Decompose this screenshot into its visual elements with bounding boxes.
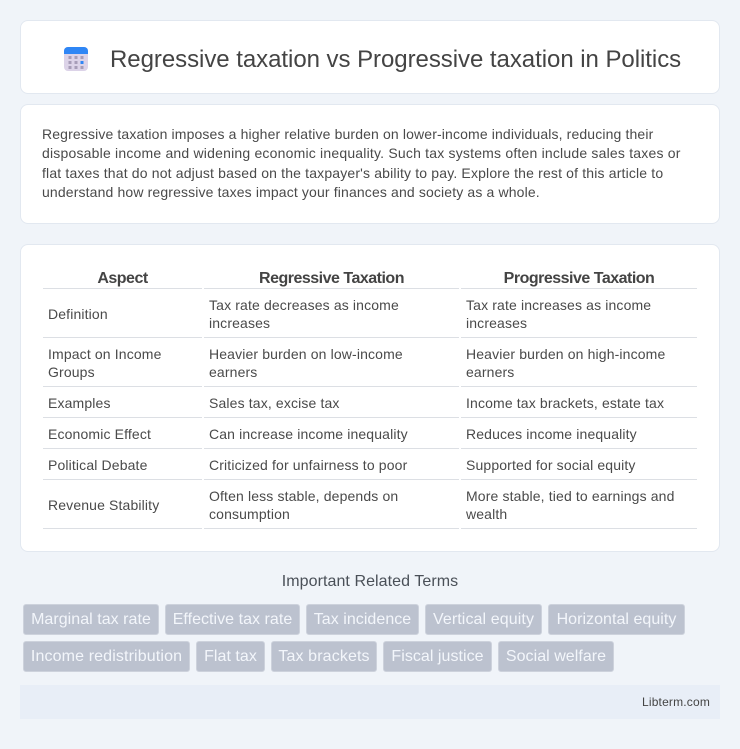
related term tags bbox=[23, 604, 685, 672]
table rows: earners bbox=[466, 364, 514, 380]
related term tags: Fiscal justice bbox=[391, 648, 484, 665]
comparison table card bbox=[20, 244, 720, 552]
table rows: increases bbox=[209, 315, 270, 331]
table rows bbox=[43, 297, 697, 529]
table rows: Supported for social equity bbox=[466, 457, 636, 473]
intro text: flat taxes that do not adjust based on the taxpayer's ability to pay. Explore the rest of this article to bbox=[42, 165, 663, 181]
related term tags: Tax brackets bbox=[278, 648, 370, 665]
table header: Regressive Taxation bbox=[259, 270, 404, 287]
icon: calendar bbox=[64, 47, 88, 71]
header card bbox=[20, 20, 720, 94]
table rows: wealth bbox=[466, 506, 507, 522]
table rows: Tax rate increases as income bbox=[466, 297, 651, 313]
table rows: Definition bbox=[48, 306, 108, 322]
intro card bbox=[20, 104, 720, 224]
table rows: increases bbox=[466, 315, 527, 331]
table rows: Heavier burden on low-income bbox=[209, 346, 403, 362]
related term tags: Vertical equity bbox=[433, 611, 534, 628]
footer credit: Libterm.com bbox=[642, 695, 710, 709]
intro text: understand how regressive taxes impact your finances and society as a whole. bbox=[42, 184, 540, 200]
footer bar bbox=[20, 685, 720, 719]
table rows: Heavier burden on high-income bbox=[466, 346, 665, 362]
table header: Aspect bbox=[97, 270, 148, 287]
related term tags: Horizontal equity bbox=[557, 611, 676, 628]
table header: Progressive Taxation bbox=[504, 270, 654, 287]
table rows: Sales tax, excise tax bbox=[209, 395, 340, 411]
table rows: Groups bbox=[48, 364, 95, 380]
intro text: Regressive taxation imposes a higher relative burden on lower-income individuals, reducing their bbox=[42, 126, 653, 142]
table rows: Economic Effect bbox=[48, 426, 151, 442]
related term tags: Income redistribution bbox=[31, 648, 182, 665]
table rows: Reduces income inequality bbox=[466, 426, 637, 442]
table rows: Political Debate bbox=[48, 457, 148, 473]
related term tags: Marginal tax rate bbox=[31, 611, 151, 628]
comparison table bbox=[43, 270, 697, 529]
table rows: More stable, tied to earnings and bbox=[466, 488, 675, 504]
related term tags: Flat tax bbox=[204, 648, 257, 665]
table rows: consumption bbox=[209, 506, 290, 522]
table rows: Examples bbox=[48, 395, 111, 411]
table rows: Tax rate decreases as income bbox=[209, 297, 399, 313]
intro text: disposable income and widening economic inequality. Such tax systems often include sales taxes or bbox=[42, 145, 681, 161]
related terms heading: Important Related Terms bbox=[282, 573, 458, 590]
table rows: Impact on Income bbox=[48, 346, 162, 362]
table rows: earners bbox=[209, 364, 257, 380]
related term tags: Social welfare bbox=[506, 648, 606, 665]
table rows: Criticized for unfairness to poor bbox=[209, 457, 407, 473]
table rows: Can increase income inequality bbox=[209, 426, 408, 442]
intro text bbox=[42, 126, 681, 200]
table header bbox=[43, 270, 697, 289]
related term tags: Tax incidence bbox=[314, 611, 411, 628]
related term tags: Effective tax rate bbox=[173, 611, 292, 628]
table rows: Often less stable, depends on bbox=[209, 488, 398, 504]
table rows: Revenue Stability bbox=[48, 497, 159, 513]
title: Regressive taxation vs Progressive taxation in Politics bbox=[110, 46, 681, 73]
table rows: Income tax brackets, estate tax bbox=[466, 395, 664, 411]
